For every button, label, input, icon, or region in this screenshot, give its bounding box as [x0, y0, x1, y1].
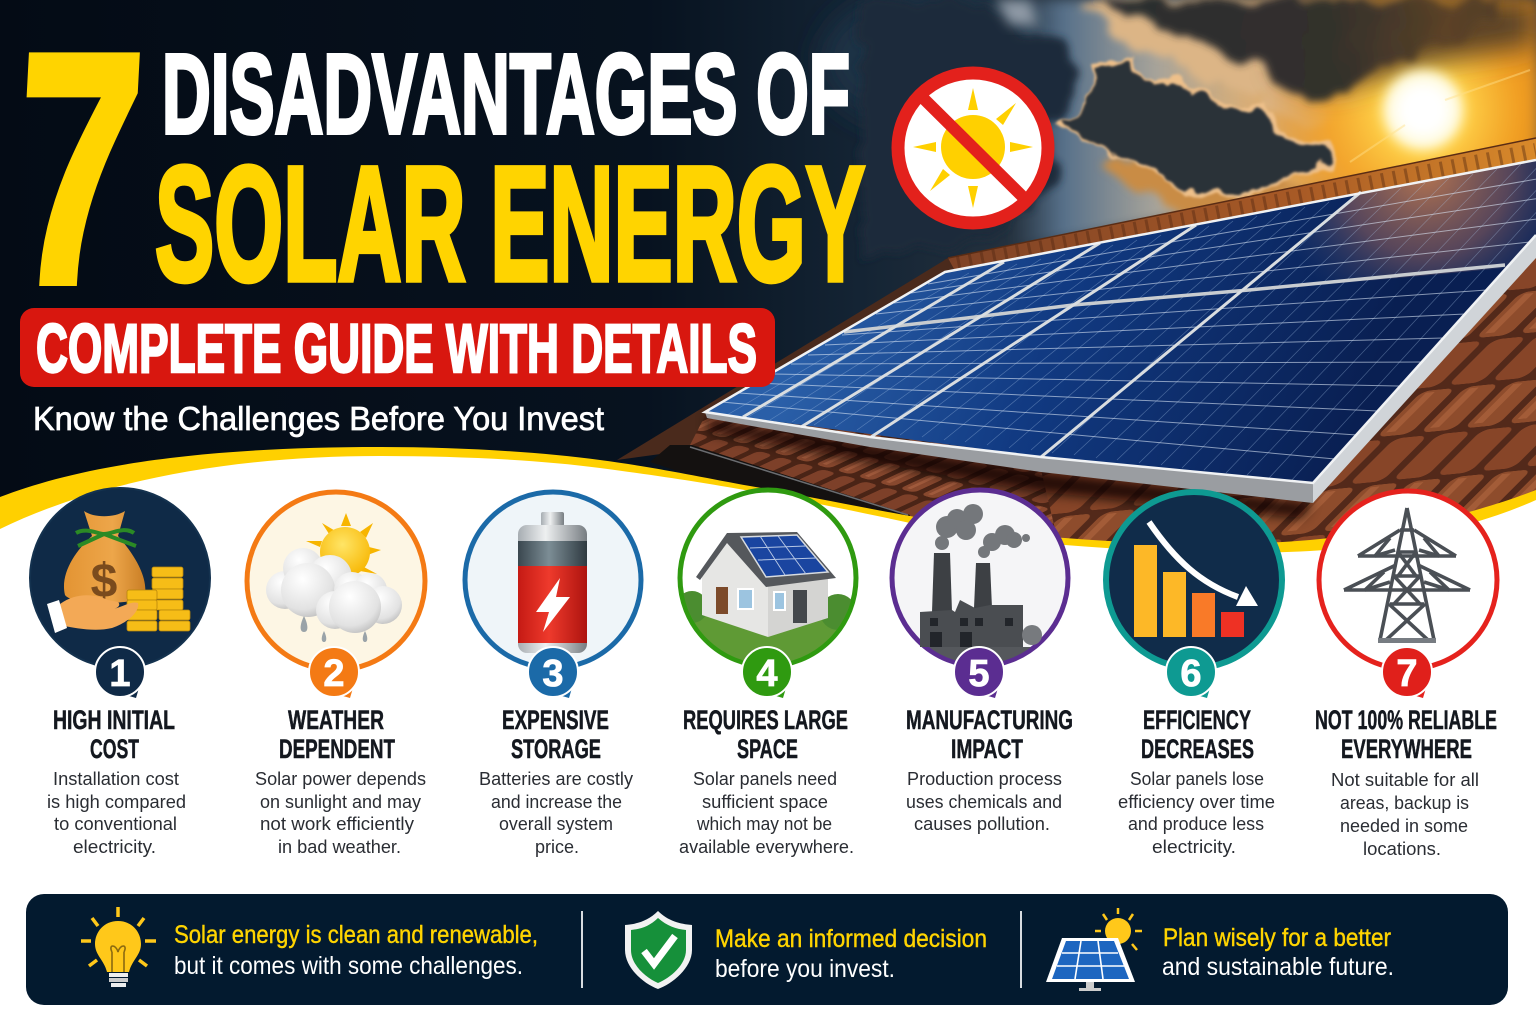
description 4: sufficient space — [702, 792, 828, 812]
heading 1 — [53, 705, 175, 764]
heading 7: EVERYWHERE — [1341, 734, 1472, 764]
footer message 1: but it comes with some challenges. — [174, 952, 523, 980]
description 2: not work efficiently — [260, 814, 414, 834]
description 4: Solar panels need — [693, 769, 837, 789]
description 4: which may not be — [696, 814, 832, 834]
red banner: complete guide with details — [20, 308, 775, 387]
badge 6 — [1166, 647, 1216, 698]
icon: electricity pylon — [1319, 491, 1497, 669]
white lower background with yellow wave — [0, 447, 1536, 1024]
heading 4: REQUIRES LARGE — [683, 705, 848, 735]
description 3: and increase the — [491, 792, 622, 812]
description 7: locations. — [1363, 839, 1441, 859]
heading 6 — [1141, 705, 1254, 764]
heading 5: MANUFACTURING — [906, 705, 1073, 735]
description 3: overall system — [499, 814, 613, 834]
description 6: efficiency over time — [1118, 792, 1275, 812]
description 2: in bad weather. — [278, 837, 401, 857]
description 1: is high compared — [47, 792, 186, 812]
heading 6: DECREASES — [1141, 734, 1254, 764]
badge 2: 2 — [323, 653, 345, 695]
heading 4: SPACE — [737, 734, 798, 764]
description 7: needed in some — [1340, 816, 1468, 836]
description 1: to conventional — [54, 814, 177, 834]
solar panel array — [705, 150, 1536, 503]
item 4: requires large space — [676, 490, 856, 857]
badge 5 — [954, 647, 1004, 698]
icon: no sun prohibition sign — [898, 73, 1048, 223]
icon: battery with lightning bolt — [465, 492, 641, 668]
footer message 2 — [715, 925, 987, 983]
footer message 3: Plan wisely for a better — [1163, 924, 1391, 952]
description 2: on sunlight and may — [260, 792, 421, 812]
icon: sun, clouds and rain — [247, 492, 425, 670]
heading 1: HIGH INITIAL — [53, 705, 175, 735]
description 1: Installation cost — [53, 769, 179, 789]
description 6: and produce less — [1128, 814, 1264, 834]
icon: green shield with check — [625, 911, 692, 989]
description 7 — [1331, 770, 1479, 859]
footer message 1 — [174, 921, 538, 980]
roof with terracotta tiles — [617, 138, 1536, 560]
footer message 2: before you invest. — [715, 955, 895, 983]
heading 3 — [502, 705, 609, 764]
heading 5 — [906, 705, 1073, 764]
description 1: electricity. — [73, 837, 156, 857]
badge 4: 4 — [756, 653, 778, 695]
badge 6: 6 — [1180, 653, 1202, 695]
heading 6: EFFICIENCY — [1143, 705, 1251, 735]
heading 7 — [1315, 705, 1497, 764]
badge 1 — [95, 647, 145, 698]
description 5: uses chemicals and — [906, 792, 1062, 812]
item 5: manufacturing impact — [892, 490, 1073, 834]
icon: light bulb — [81, 907, 156, 987]
description 6: Solar panels lose — [1130, 769, 1264, 789]
heading 3: EXPENSIVE — [502, 705, 609, 735]
icon: money bag, hand and coins — [30, 488, 210, 668]
heading 2: WEATHER — [288, 705, 384, 735]
red banner: complete guide with details: COMPLETE GUIDE WITH DETAILS — [36, 310, 757, 387]
item 6: efficiency decreases — [1106, 492, 1282, 857]
item 7: not 100% reliable everywhere — [1315, 491, 1497, 859]
description 3: price. — [535, 837, 579, 857]
heading 2: DEPENDENT — [279, 734, 395, 764]
description 1 — [47, 769, 186, 857]
title: disadvantages of: DISADVANTAGES OF — [162, 31, 850, 157]
subtitle: Know the Challenges Before You Invest — [33, 400, 604, 437]
footer message 3: and sustainable future. — [1162, 953, 1394, 981]
description 7: Not suitable for all — [1331, 770, 1479, 790]
heading 2 — [279, 705, 395, 764]
badge 5: 5 — [968, 653, 990, 695]
icon: falling bar chart with arrow — [1106, 492, 1282, 668]
footer message 1: Solar energy is clean and renewable, — [174, 921, 538, 949]
description 5: Production process — [907, 769, 1062, 789]
badge 3 — [528, 647, 578, 698]
item 3: expensive storage — [465, 492, 641, 857]
background: stormy sky with sun — [0, 0, 1536, 560]
footer panel — [26, 894, 1508, 1005]
description 7: areas, backup is — [1340, 793, 1469, 813]
description 3: Batteries are costly — [479, 769, 633, 789]
item 2: weather dependent — [247, 492, 426, 857]
title: solar energy: SOLAR ENERGY — [155, 132, 865, 315]
footer message 3 — [1162, 924, 1394, 981]
description 2 — [255, 769, 426, 857]
badge 3: 3 — [542, 653, 564, 695]
item 1: high initial cost — [30, 488, 210, 857]
badge 1: 1 — [109, 653, 131, 695]
heading 1: COST — [90, 734, 139, 764]
badge 7 — [1382, 647, 1432, 698]
icon: money bag, hand and coins: $ — [91, 555, 118, 608]
footer message 2: Make an informed decision — [715, 925, 987, 953]
icon: solar panel with sun — [1046, 908, 1142, 991]
badge 2 — [309, 647, 359, 698]
heading 5: IMPACT — [951, 734, 1023, 764]
description 4: available everywhere. — [679, 837, 854, 857]
description 4 — [679, 769, 854, 857]
badge 7: 7 — [1396, 653, 1418, 695]
description 5 — [906, 769, 1062, 834]
description 5: causes pollution. — [914, 814, 1050, 834]
description 6: electricity. — [1152, 837, 1236, 857]
description 6 — [1118, 769, 1275, 857]
description 3 — [479, 769, 633, 857]
icon: house with roof solar panels — [676, 490, 856, 675]
badge 4 — [742, 647, 792, 698]
icon: smoking factory — [892, 490, 1068, 666]
heading 3: STORAGE — [511, 734, 601, 764]
heading 4 — [683, 705, 848, 764]
description 2: Solar power depends — [255, 769, 426, 789]
